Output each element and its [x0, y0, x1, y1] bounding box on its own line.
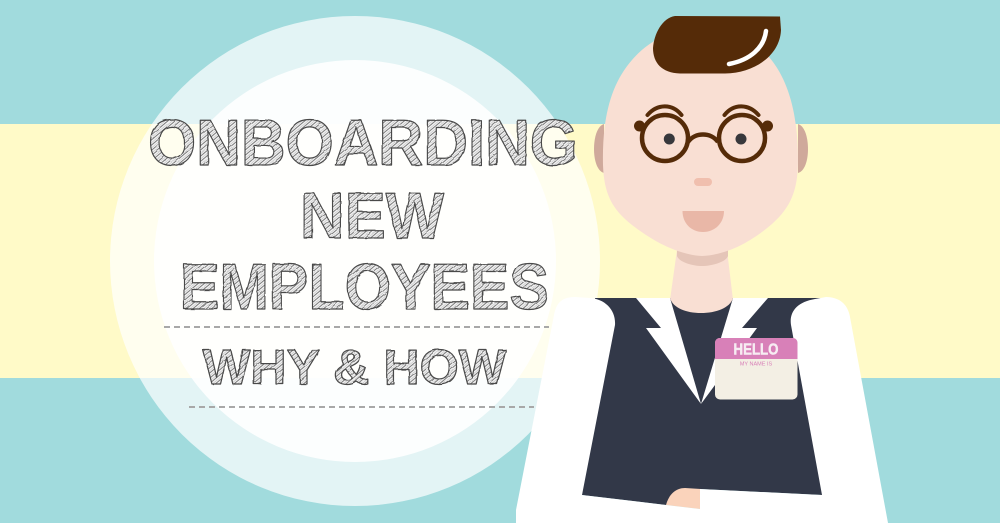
ears — [594, 124, 808, 173]
nose — [694, 178, 712, 186]
eyes — [664, 134, 746, 144]
badge text: HELLO: HELLO — [734, 342, 778, 358]
subtitle: WHY & HOW: WHY & HOW — [203, 341, 507, 395]
character: employee illustration — [516, 16, 888, 523]
left arm sleeve — [516, 297, 700, 523]
concentric white circles — [110, 16, 600, 506]
hair — [653, 16, 781, 74]
eyebrows — [648, 106, 758, 115]
right lapel — [701, 298, 768, 404]
neck — [670, 250, 733, 300]
title line: NEW: NEW — [300, 179, 445, 252]
dashed rule under subtitle — [189, 406, 534, 408]
neck collar opening — [670, 298, 733, 313]
mouth — [682, 211, 724, 232]
badge text: MY NAME IS: MY NAME IS — [740, 362, 772, 368]
dashed rule under title — [164, 326, 549, 328]
hand — [666, 488, 701, 509]
title line: EMPLOYEES: EMPLOYEES — [180, 250, 549, 323]
head — [603, 28, 798, 256]
title: Onboarding New Employees, Why and How — [148, 106, 578, 395]
glasses — [634, 115, 773, 161]
left lapel — [636, 298, 701, 404]
name badge — [715, 338, 798, 400]
neck shadow — [677, 250, 728, 266]
vest — [582, 298, 830, 505]
right arm sleeve — [700, 297, 888, 523]
title line: ONBOARDING: ONBOARDING — [148, 106, 578, 179]
